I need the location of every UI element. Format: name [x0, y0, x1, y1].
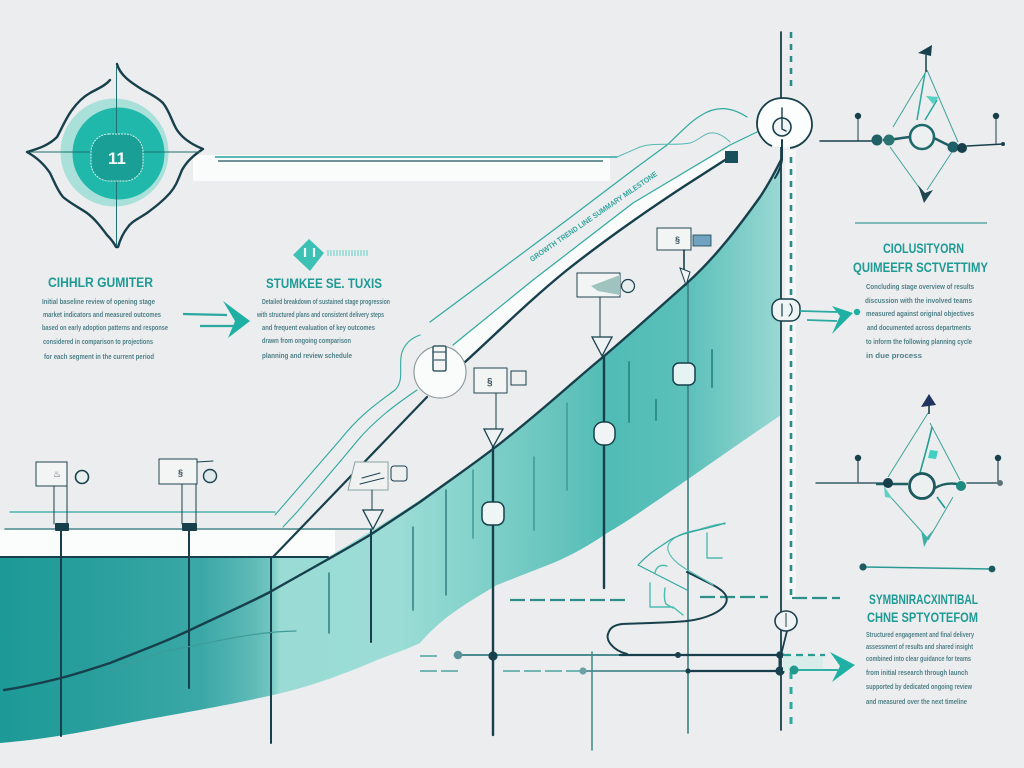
body copy: measured against original objectives	[866, 309, 974, 318]
dashed guide lines	[420, 32, 840, 730]
body copy: and frequent evaluation of key outcomes	[262, 323, 375, 332]
signpost 6: §	[675, 235, 680, 245]
text block: left column	[42, 275, 168, 361]
body copy: discussion with the involved teams	[865, 296, 972, 305]
signpost 6	[657, 228, 711, 285]
vertical gauge lines	[61, 32, 781, 750]
heading: SYMBNIRACXINTIBAL	[869, 592, 978, 607]
compass inner circle	[72, 108, 164, 200]
heading line two: CHNE SPTYOTEFOM	[867, 610, 978, 625]
body copy: Initial baseline review of opening stage	[42, 297, 155, 306]
body copy: considered in comparison to projections	[43, 337, 153, 346]
compass badge	[27, 64, 203, 247]
body copy: based on early adoption patterns and response	[42, 323, 168, 332]
body copy: with structured plans and consistent delivery steps	[256, 310, 384, 319]
body copy	[42, 297, 168, 361]
teal area chart	[0, 160, 781, 743]
body copy	[866, 630, 975, 706]
compass value: 11	[108, 149, 126, 168]
text block: lower right	[866, 592, 978, 706]
white band behind top line	[193, 155, 610, 181]
node diagram: top right	[820, 45, 1005, 203]
body copy: Concluding stage overview of results	[866, 282, 974, 291]
top horizontal double line	[215, 157, 617, 161]
body copy: and measured over the next timeline	[866, 697, 967, 706]
body copy: from initial research through launch	[866, 668, 968, 677]
divider: top right	[855, 222, 987, 224]
icon: diamond badge	[293, 239, 368, 271]
compass value box	[91, 134, 143, 181]
signpost 5	[577, 273, 634, 356]
arrow: left	[183, 301, 250, 338]
body copy	[256, 297, 390, 360]
horizon lines	[0, 512, 372, 557]
heading: STUMKEE SE. TUXIS	[266, 276, 382, 291]
body copy	[865, 282, 974, 360]
signpost 4: §	[487, 377, 493, 388]
heading: CIHHLR GUMITER	[48, 275, 153, 290]
node diagram: lower right	[816, 394, 1003, 547]
body copy: Detailed breakdown of sustained stage progression	[262, 297, 390, 306]
signpost 3	[348, 462, 407, 529]
main growth curve	[4, 160, 781, 690]
S-curve path	[608, 523, 727, 654]
body copy: combined into clear guidance for teams	[866, 654, 971, 663]
body copy: planning and review schedule	[262, 351, 352, 360]
compass star outline	[27, 64, 203, 247]
faint secondary curve	[110, 631, 296, 671]
signpost 2: §	[178, 468, 183, 478]
milestone node with phone icon	[414, 346, 466, 398]
body copy: for each segment in the current period	[44, 352, 154, 361]
body copy: Structured engagement and final delivery	[866, 630, 975, 639]
heading line two: QUIMEEFR SCTVETTIMY	[853, 260, 988, 275]
body copy: assessment of results and shared insight	[866, 642, 973, 651]
text block: top right	[853, 241, 988, 360]
diagonal white ribbon	[453, 147, 730, 362]
clock node	[757, 98, 812, 178]
body copy: and documented across departments	[867, 323, 971, 332]
body copy: to inform the following planning cycle	[866, 337, 972, 346]
signpost 4	[474, 368, 526, 447]
diagonal ribbon label: GROWTH TREND LINE SUMMARY MILESTONE	[528, 169, 659, 264]
pale strip behind dashed guide	[785, 150, 796, 600]
compass crosshair	[30, 66, 200, 246]
pill markers	[482, 299, 800, 631]
white band under the horizon	[0, 530, 335, 558]
body copy: supported by dedicated ongoing review	[866, 682, 972, 691]
text block: second column	[256, 276, 390, 360]
compass outer circle	[60, 98, 168, 206]
arrow: upper right	[800, 306, 860, 334]
signpost 1: ♨	[53, 469, 61, 479]
body copy: in due process	[866, 351, 922, 360]
body copy: drawn from ongoing comparison	[262, 336, 351, 345]
arrow: lower right	[783, 652, 855, 682]
signpost 1	[36, 462, 88, 531]
divider with end dots	[859, 563, 995, 572]
signpost 2	[159, 459, 216, 531]
body copy: market indicators and measured outcomes	[43, 310, 161, 319]
horizontal timeline lines	[454, 631, 787, 676]
heading: CIOLUSITYORN	[883, 241, 964, 256]
diagonal trend lines	[273, 109, 757, 557]
